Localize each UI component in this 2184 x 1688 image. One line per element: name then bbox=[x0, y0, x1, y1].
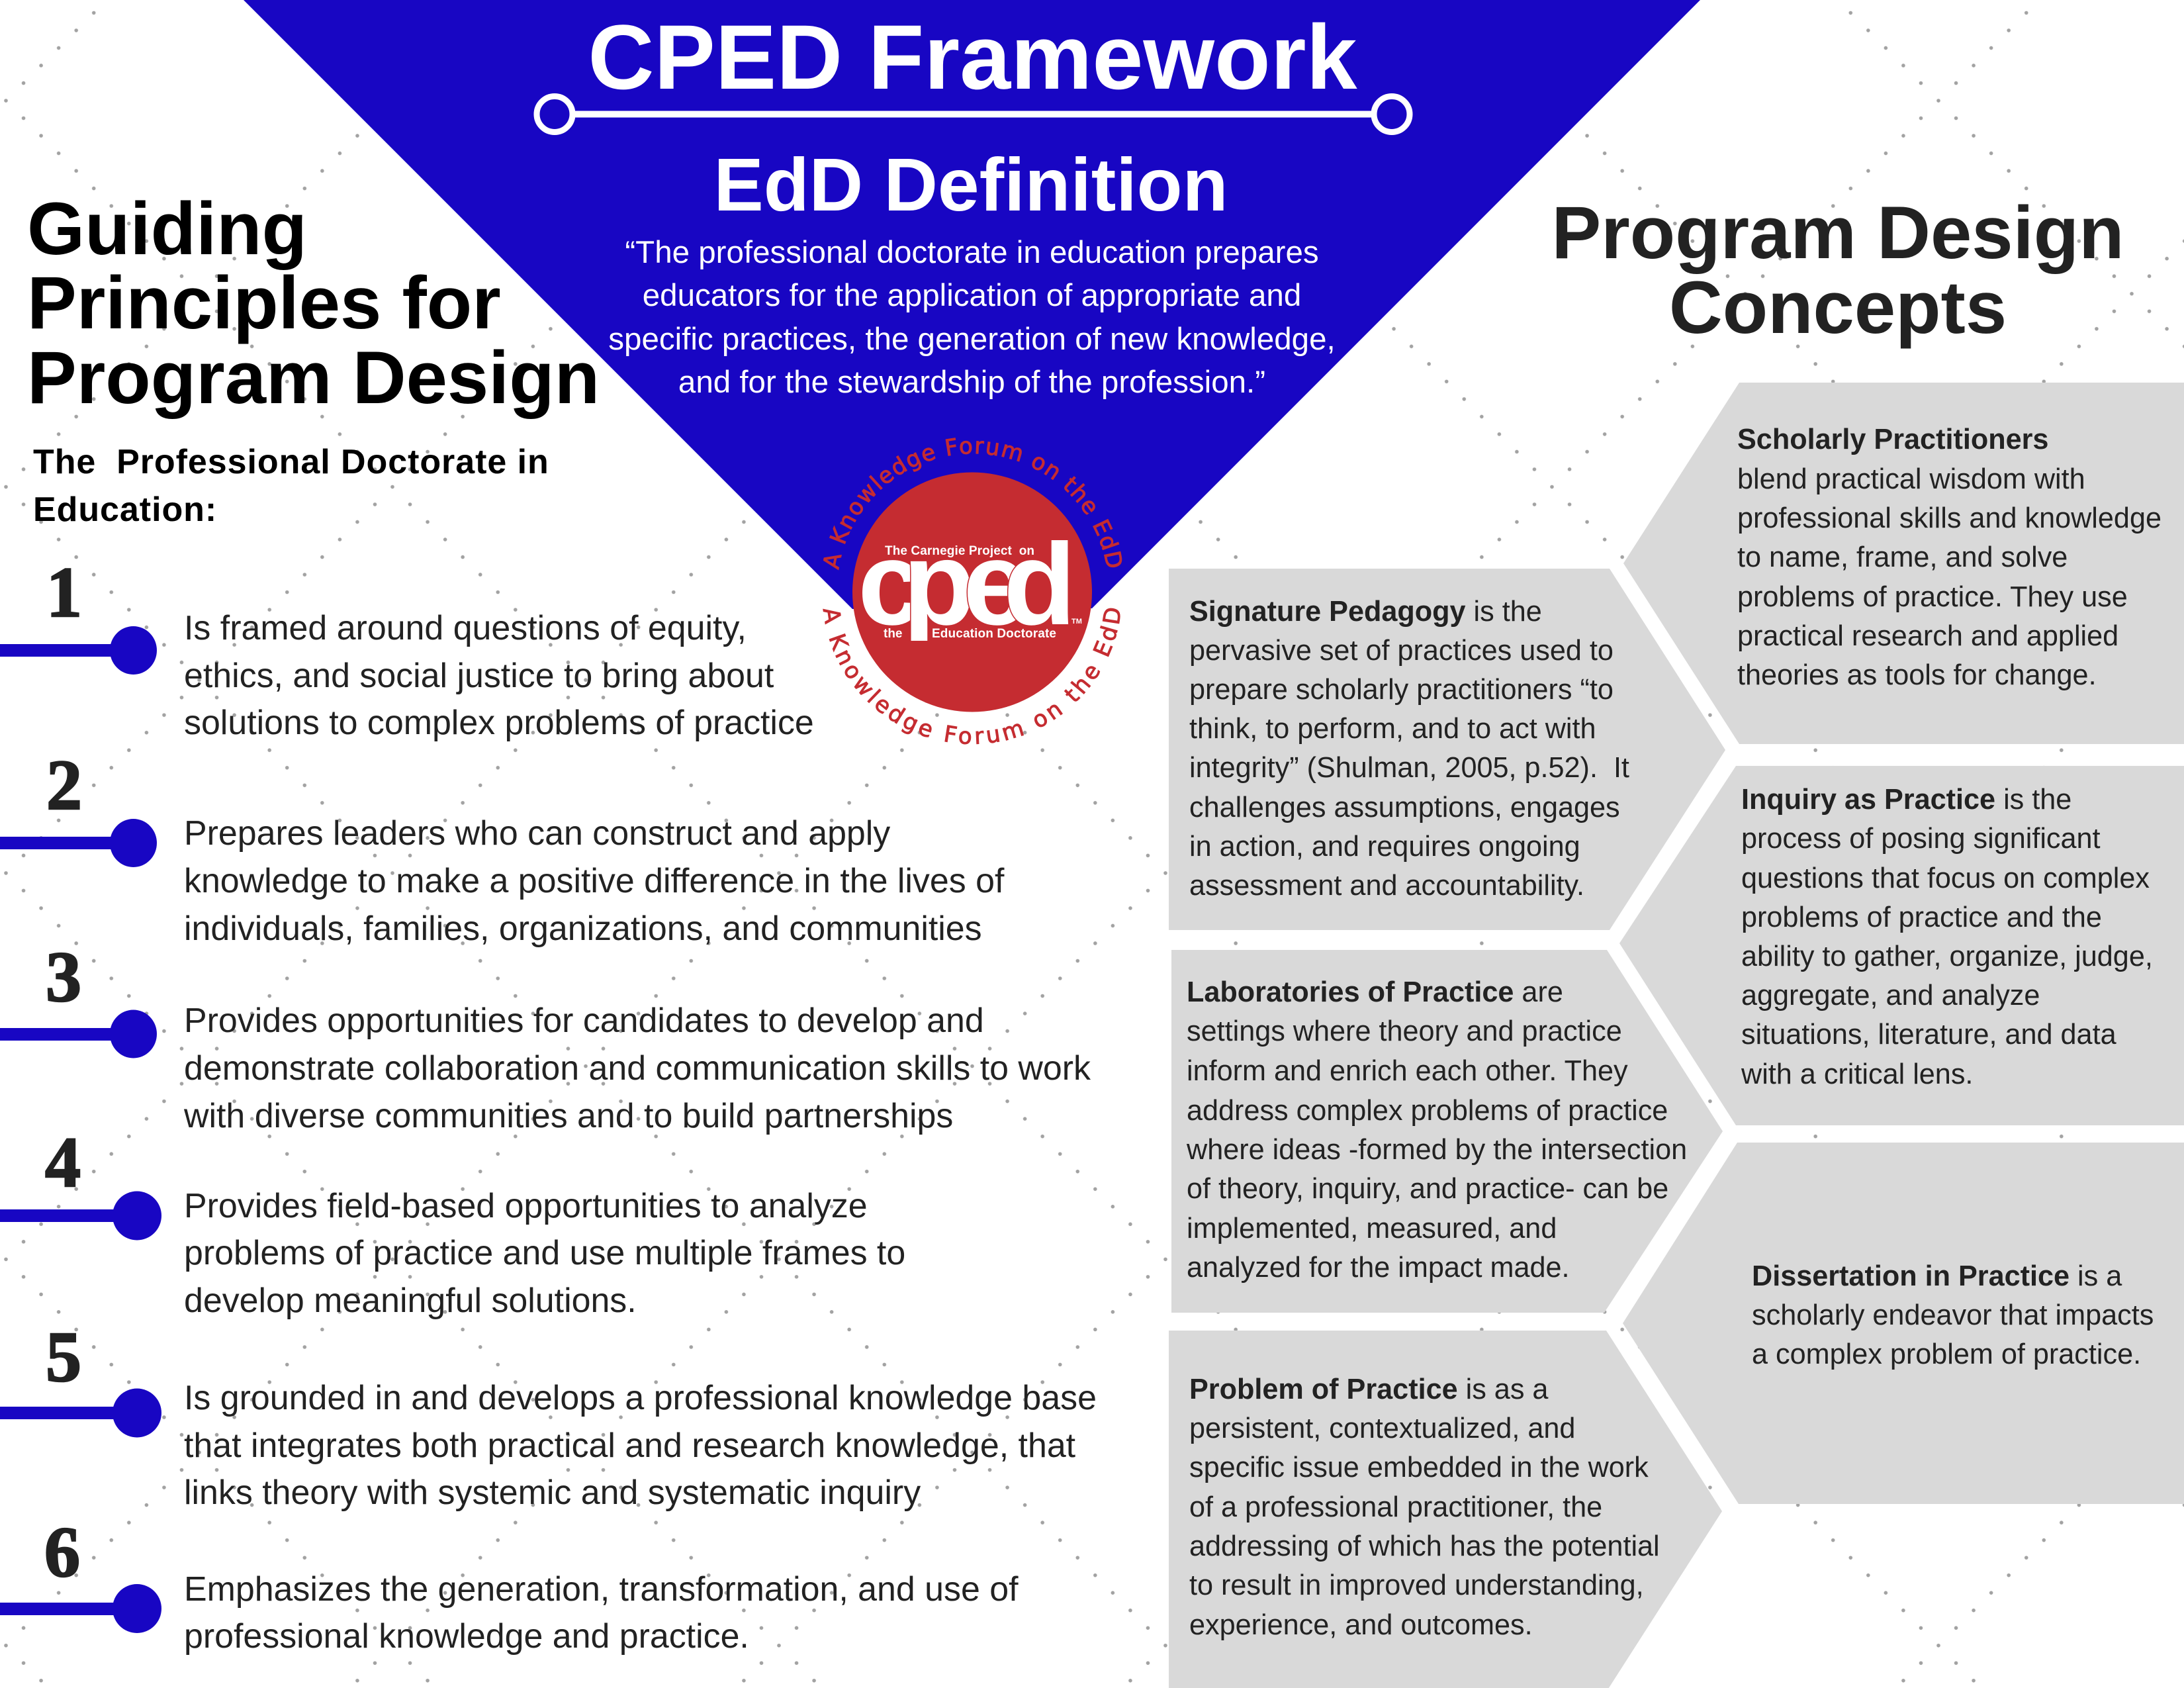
panel: Laboratories of Practice bbox=[1171, 950, 1723, 1313]
Signature Pedagogy text: challenges assumptions, engages bbox=[1189, 792, 1620, 823]
principle 5 text: that integrates both practical and research knowledge, that bbox=[184, 1426, 1076, 1464]
principle 2 text: individuals, families, organizations, and communities bbox=[184, 909, 982, 947]
Problem of Practice text: persistent, contextualized, and bbox=[1189, 1413, 1575, 1444]
Inquiry as Practice text: problems of practice and the bbox=[1741, 902, 2102, 933]
Problem of Practice text: of a professional practitioner, the bbox=[1189, 1491, 1602, 1523]
principle 1 bbox=[0, 553, 814, 741]
principle 5 text: links theory with systemic and systematic inquiry bbox=[184, 1473, 921, 1511]
principle 4 text: develop meaningful solutions. bbox=[184, 1281, 637, 1319]
principle 6 bbox=[0, 1513, 1019, 1655]
timeline marker 4 bbox=[0, 1192, 161, 1241]
EdD definition quote: specific practices, the generation of new knowledge, bbox=[608, 322, 1336, 357]
logo wordmark: e bbox=[963, 517, 1029, 650]
principle 1 text: ethics, and social justice to bring about bbox=[184, 656, 774, 694]
logo tagline top: The Carnegie Project on bbox=[885, 544, 1034, 558]
timeline marker 5 bbox=[0, 1389, 161, 1438]
Signature Pedagogy text: assessment and accountability. bbox=[1189, 870, 1584, 902]
subheading: The Professional Doctorate in Education: Education: bbox=[33, 491, 217, 529]
Dissertation in Practice text: scholarly endeavor that impacts bbox=[1752, 1299, 2154, 1331]
principle 2 bbox=[0, 746, 1005, 947]
number 2: 2 bbox=[46, 746, 82, 825]
timeline marker 1 bbox=[0, 626, 157, 675]
principle 1 text: solutions to complex problems of practice bbox=[184, 703, 814, 741]
panel: Scholarly Practitioners bbox=[1623, 383, 2184, 744]
timeline marker 6 bbox=[0, 1584, 161, 1633]
panel: Problem of Practice bbox=[1169, 1331, 1722, 1688]
Inquiry as Practice text: situations, literature, and data bbox=[1741, 1019, 2117, 1051]
blue header banner bbox=[244, 0, 1700, 609]
logo tagline bottom right: Education Doctorate bbox=[932, 627, 1056, 641]
Laboratories of Practice text: address complex problems of practice bbox=[1187, 1095, 1668, 1127]
Problem of Practice text: addressing of which has the potential bbox=[1189, 1530, 1660, 1562]
Signature Pedagogy text: pervasive set of practices used to bbox=[1189, 635, 1614, 667]
Dissertation in Practice text: a complex problem of practice. bbox=[1752, 1338, 2141, 1370]
Signature Pedagogy text: Signature Pedagogy is the bbox=[1189, 596, 1542, 628]
Inquiry as Practice text: Inquiry as Practice is the bbox=[1741, 784, 2071, 816]
logo wordmark: p bbox=[903, 517, 976, 650]
principle 4 text: Provides field-based opportunities to analyze bbox=[184, 1186, 868, 1225]
Signature Pedagogy text: in action, and requires ongoing bbox=[1189, 831, 1580, 863]
Laboratories of Practice text: settings where theory and practice bbox=[1187, 1015, 1622, 1047]
Problem of Practice text: experience, and outcomes. bbox=[1189, 1609, 1533, 1641]
Inquiry as Practice text: aggregate, and analyze bbox=[1741, 980, 2040, 1011]
EdD definition quote: educators for the application of appropriate and bbox=[643, 278, 1301, 313]
Laboratories of Practice text: analyzed for the impact made. bbox=[1187, 1252, 1570, 1284]
timeline marker 3 bbox=[0, 1010, 157, 1058]
Scholarly Practitioners text: Scholarly Practitioners bbox=[1737, 424, 2048, 455]
Laboratories of Practice text: where ideas -formed by the intersection bbox=[1186, 1134, 1687, 1166]
panel: Signature Pedagogy bbox=[1169, 569, 1725, 930]
Problem of Practice text: Problem of Practice is as a bbox=[1189, 1374, 1548, 1405]
principle 4 bbox=[0, 1123, 905, 1319]
panel: Inquiry as Practice bbox=[1619, 766, 2184, 1125]
Problem of Practice text: specific issue embedded in the work bbox=[1189, 1452, 1649, 1483]
EdD definition quote: “The professional doctorate in education prepares bbox=[625, 235, 1319, 270]
Scholarly Practitioners text: to name, frame, and solve bbox=[1737, 541, 2068, 573]
red logo disc bbox=[852, 473, 1092, 712]
Scholarly Practitioners text: practical research and applied bbox=[1737, 620, 2118, 652]
principle 1 text: Is framed around questions of equity, bbox=[184, 608, 747, 647]
panel: Dissertation in Practice bbox=[1623, 1143, 2184, 1504]
Signature Pedagogy text: prepare scholarly practitioners “to bbox=[1189, 674, 1614, 706]
principle 5 bbox=[0, 1318, 1097, 1511]
heading: EdD Definition: EdD Definition bbox=[714, 143, 1228, 226]
number 5: 5 bbox=[46, 1318, 81, 1397]
subheading: The Professional Doctorate in Education: The Professional Doctorate in bbox=[33, 443, 549, 481]
bottom curved text: A Knowledge Forum on the EdD bbox=[823, 608, 1120, 744]
Inquiry as Practice text: ability to gather, organize, judge, bbox=[1741, 941, 2153, 972]
Signature Pedagogy text: integrity” (Shulman, 2005, p.52). It bbox=[1189, 752, 1629, 784]
logo trademark: TM bbox=[1071, 618, 1082, 626]
number 4: 4 bbox=[45, 1123, 81, 1202]
logo tagline bottom left: the bbox=[884, 627, 903, 641]
principle 3 text: Provides opportunities for candidates to develop and bbox=[184, 1001, 984, 1039]
heading: Program Design Concepts: Concepts bbox=[1669, 266, 2007, 349]
principle 3 text: demonstrate collaboration and communication skills to work bbox=[184, 1049, 1091, 1087]
number 3: 3 bbox=[46, 938, 81, 1017]
Laboratories of Practice text: of theory, inquiry, and practice- can be bbox=[1187, 1173, 1668, 1205]
top curved text: A Knowledge Forum on the EdD bbox=[823, 438, 1122, 571]
principle 5 text: Is grounded in and develops a professional knowledge base bbox=[184, 1378, 1097, 1417]
CPED logo badge bbox=[823, 438, 1122, 744]
logo wordmark: c bbox=[858, 517, 924, 650]
Dissertation in Practice text: Dissertation in Practice is a bbox=[1752, 1260, 2122, 1292]
Problem of Practice text: to result in improved understanding, bbox=[1189, 1570, 1644, 1601]
Inquiry as Practice text: with a critical lens. bbox=[1741, 1058, 1973, 1090]
EdD definition quote: and for the stewardship of the profession.” bbox=[678, 365, 1265, 400]
principle 6 text: Emphasizes the generation, transformation, and use of bbox=[184, 1570, 1019, 1608]
heading: Guiding Principles for Program Design: Guiding bbox=[27, 187, 307, 270]
timeline marker 2 bbox=[0, 819, 157, 867]
heading: Guiding Principles for Program Design: Principles for bbox=[27, 261, 501, 344]
Scholarly Practitioners text: blend practical wisdom with bbox=[1737, 463, 2085, 495]
Inquiry as Practice text: process of posing significant bbox=[1741, 823, 2101, 855]
principle 4 text: problems of practice and use multiple frames to bbox=[184, 1233, 905, 1272]
Scholarly Practitioners text: theories as tools for change. bbox=[1737, 659, 2097, 691]
Laboratories of Practice text: implemented, measured, and bbox=[1187, 1213, 1557, 1244]
logo wordmark: d bbox=[1003, 517, 1076, 650]
heading: Program Design Concepts: Program Design bbox=[1551, 191, 2124, 274]
principle 2 text: knowledge to make a positive difference in the lives of bbox=[184, 861, 1005, 900]
number 6: 6 bbox=[44, 1513, 80, 1592]
Signature Pedagogy text: think, to perform, and to act with bbox=[1189, 713, 1596, 745]
title: CPED Framework: CPED Framework bbox=[588, 7, 1358, 109]
Laboratories of Practice text: inform and enrich each other. They bbox=[1187, 1055, 1628, 1087]
Scholarly Practitioners text: professional skills and knowledge bbox=[1737, 502, 2161, 534]
principle 3 bbox=[0, 938, 1091, 1135]
number 1: 1 bbox=[46, 553, 82, 632]
Laboratories of Practice text: Laboratories of Practice are bbox=[1187, 976, 1563, 1008]
principle 6 text: professional knowledge and practice. bbox=[184, 1617, 749, 1655]
heading: Guiding Principles for Program Design: Program Design bbox=[27, 336, 600, 419]
Inquiry as Practice text: questions that focus on complex bbox=[1741, 863, 2150, 894]
principle 3 text: with diverse communities and to build partnerships bbox=[183, 1096, 953, 1135]
Scholarly Practitioners text: problems of practice. They use bbox=[1737, 581, 2128, 613]
principle 2 text: Prepares leaders who can construct and apply bbox=[184, 814, 890, 852]
title divider with ring ends bbox=[537, 97, 1410, 132]
